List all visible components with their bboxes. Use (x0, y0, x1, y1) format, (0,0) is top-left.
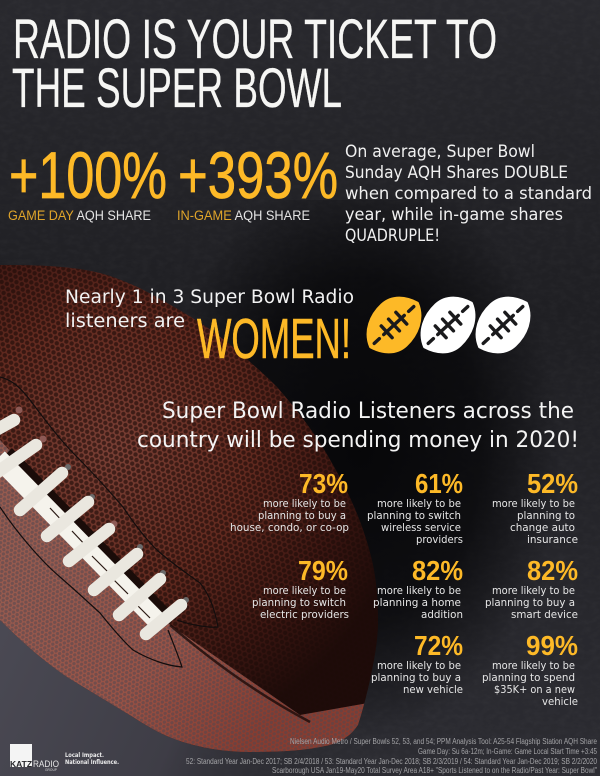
text: AQH shares explanation: when compared to a standard (345, 184, 592, 203)
stat: 79% electric providers: electric providers (260, 608, 349, 621)
stat: 61% wireless service providers: providers (416, 533, 463, 546)
stat: 73% house, condo, or co-op: house, condo, or co-op (230, 521, 349, 534)
stat: 82% home addition: 82% (412, 555, 463, 586)
text: AQH shares explanation (345, 142, 592, 245)
logo: Katz Radio Group: RADIO (33, 759, 59, 770)
heading: spending money in 2020: country will be spending money in 2020! (137, 428, 579, 453)
icon: three footballs, one in three highlighted (355, 286, 542, 364)
stat: 72% new vehicle (371, 630, 463, 696)
stat: 82% smart device (485, 555, 578, 621)
photo: football with laces (0, 260, 385, 760)
stat: 52% change auto insurance: 52% (527, 468, 578, 499)
stat: 52% change auto insurance: planning to (517, 509, 575, 522)
footnotes: sources (186, 737, 597, 775)
stat: 72% new vehicle: new vehicle (403, 683, 463, 696)
stat: 79% electric providers: planning to switch (252, 596, 346, 609)
stat: +100% game day AQH share (8, 138, 167, 223)
stat: 72% new vehicle: 72% (414, 630, 463, 661)
text: AQH shares explanation: On average, Super Bowl (345, 142, 535, 161)
stat: 99% $35K+ new vehicle: vehicle (542, 695, 578, 708)
stat: +393% in-game AQH share: +393% (178, 138, 338, 212)
stat: 82% smart device: planning to buy a (485, 596, 575, 609)
stat: +393% in-game AQH share (177, 138, 338, 223)
stat: 99% $35K+ new vehicle: $35K+ on a new (494, 683, 575, 696)
stat: 79% electric providers: 79% (298, 555, 348, 586)
logo: Katz Radio Group (10, 744, 59, 772)
stat: 99% $35K+ new vehicle (482, 630, 578, 708)
title (12, 7, 497, 119)
stat: 72% new vehicle: more likely to be (377, 659, 461, 672)
stat: 82% home addition: more likely to be (377, 584, 461, 597)
stat: 82% smart device: more likely to be (492, 584, 575, 597)
stat: 61% wireless service providers (367, 468, 463, 546)
stat: 72% new vehicle: planning to buy a (371, 671, 461, 684)
text: nearly 1 in 3 listeners are women: listeners are (65, 311, 185, 332)
stat: 52% change auto insurance: change auto (510, 521, 575, 534)
stat: 79% electric providers (252, 555, 349, 621)
stat: 99% $35K+ new vehicle: 99% (526, 630, 578, 661)
stat: 61% wireless service providers: wireless service (381, 521, 461, 534)
stat: 99% $35K+ new vehicle: more likely to be (492, 659, 575, 672)
text: AQH shares explanation: Sunday AQH Shares DOUBLE (345, 163, 568, 182)
heading: spending money in 2020: Super Bowl Radio Listeners across the (162, 399, 574, 424)
stat: 79% electric providers: more likely to be (263, 584, 346, 597)
stat: 73% house, condo, or co-op (230, 468, 349, 534)
stat: 61% wireless service providers: planning to switch (367, 509, 461, 522)
icon: gold football (355, 286, 433, 364)
text: nearly 1 in 3 listeners are women (65, 287, 354, 371)
stat: 73% house, condo, or co-op: planning to buy a (258, 509, 346, 522)
icon: white football (464, 286, 542, 364)
stat: 52% change auto insurance: more likely to be (492, 497, 575, 510)
stat: 82% home addition: addition (421, 608, 463, 621)
text: AQH shares explanation: QUADRUPLE! (345, 226, 440, 245)
stat: 61% wireless service providers: more likely to be (377, 497, 461, 510)
heading: spending money in 2020 (137, 399, 579, 453)
stat: 99% $35K+ new vehicle: planning to spend (482, 671, 575, 684)
stat: 52% change auto insurance (492, 468, 578, 546)
stat: +393% in-game AQH share: IN-GAME AQH SHARE (177, 208, 310, 223)
tagline: local impact, national influence: Local Impact. (65, 752, 104, 759)
stat: 73% house, condo, or co-op: more likely to be (263, 497, 346, 510)
tagline: local impact, national influence: National Influence. (65, 759, 119, 766)
text: nearly 1 in 3 listeners are women: WOMEN! (197, 307, 351, 371)
stat: +100% game day AQH share: GAME DAY AQH SHARE (8, 208, 151, 223)
stat: 61% wireless service providers: 61% (415, 468, 463, 499)
title: THE SUPER BOWL (12, 56, 342, 119)
stat: 82% home addition (373, 555, 463, 621)
text: AQH shares explanation: year, while in-game shares (345, 205, 563, 224)
stat: 82% smart device: smart device (511, 608, 578, 621)
stat: 82% smart device: 82% (527, 555, 578, 586)
logo: Katz Radio Group: KATZ (10, 759, 32, 769)
stat: +100% game day AQH share: +100% (9, 138, 167, 212)
icon: white football (409, 286, 487, 364)
text: nearly 1 in 3 listeners are women: Nearly 1 in 3 Super Bowl Radio (65, 287, 354, 308)
tagline: local impact, national influence (65, 752, 119, 766)
logo: Katz Radio Group: GROUP (45, 768, 58, 772)
stat: 82% home addition: planning a home (373, 596, 461, 609)
stat: 52% change auto insurance: insurance (527, 533, 578, 546)
stat: 73% house, condo, or co-op: 73% (299, 468, 348, 499)
